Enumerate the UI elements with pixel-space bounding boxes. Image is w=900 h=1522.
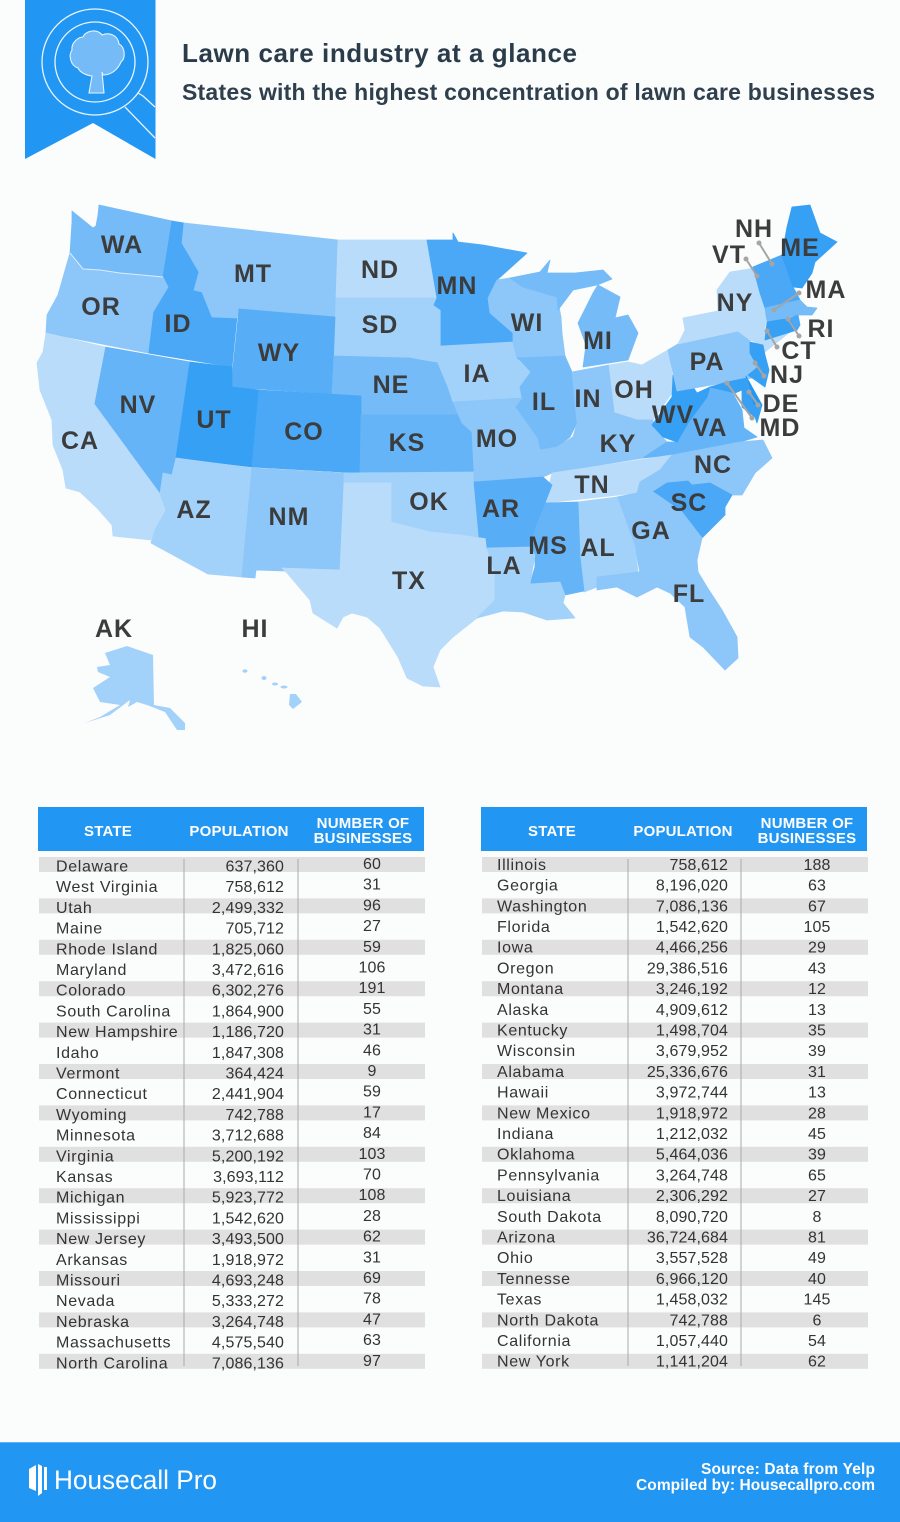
right table rows: Iowa [497, 940, 533, 957]
left table rows: 62 [363, 1229, 381, 1246]
left table rows: 106 [358, 960, 386, 976]
state labels: LA [486, 552, 522, 580]
right table rows: 2,306,292 [656, 1188, 728, 1205]
state labels: ID [164, 310, 192, 338]
state labels: PA [690, 348, 724, 376]
right table rows: Montana [497, 981, 564, 998]
state labels: FL [673, 580, 705, 608]
state labels: NJ [770, 361, 804, 389]
right table rows: 1,212,032 [656, 1126, 728, 1143]
left table rows: 31 [363, 1022, 381, 1039]
left table rows: 3,712,688 [212, 1128, 284, 1145]
right table rows: 40 [808, 1271, 826, 1288]
right table rows: 3,264,748 [656, 1167, 728, 1184]
right table rows: Indiana [497, 1126, 554, 1143]
state labels: NC [694, 451, 732, 479]
left table rows [56, 856, 386, 1372]
state labels: ND [361, 256, 399, 284]
state labels: UT [196, 406, 232, 434]
title: Lawn care industry at a glance [182, 38, 577, 68]
right table rows: Tennesse [497, 1271, 571, 1288]
state labels: TX [392, 567, 426, 595]
left table rows: 60 [363, 856, 381, 873]
left table rows: 27 [363, 918, 381, 935]
right table rows: 45 [808, 1126, 826, 1143]
left table rows: Maryland [56, 962, 127, 979]
right table rows: 13 [808, 1085, 826, 1102]
right table rows: 43 [808, 960, 826, 977]
left table rows: Michigan [56, 1190, 125, 1207]
right table rows: Arizona [497, 1229, 556, 1246]
left table header: NUMBER OF [317, 815, 409, 832]
right table rows: 39 [808, 1043, 826, 1060]
state labels: CO [284, 418, 324, 446]
right table rows: 63 [808, 878, 826, 895]
left table rows: 78 [363, 1291, 381, 1308]
state labels: CA [61, 427, 99, 455]
state labels: MI [583, 327, 613, 355]
state labels: NM [269, 503, 309, 531]
left table rows: 47 [363, 1311, 381, 1328]
state labels: MO [476, 425, 518, 453]
state labels: NV [120, 391, 156, 419]
source line: Source: Data from Yelp [701, 1461, 875, 1478]
right table rows: 3,557,528 [656, 1250, 728, 1267]
left table rows: Nebraska [56, 1314, 130, 1331]
state labels: CT [781, 337, 817, 365]
right table rows: 54 [808, 1333, 826, 1350]
left table header [38, 807, 424, 851]
state labels: MN [437, 272, 477, 300]
state labels: OK [409, 488, 449, 516]
left table rows: Connecticut [56, 1086, 148, 1103]
left table rows: Wyoming [56, 1107, 127, 1124]
right table rows: Pennsylvania [497, 1167, 600, 1184]
left table rows: 191 [358, 980, 386, 997]
right table rows: 29 [808, 940, 826, 957]
right table rows: 145 [804, 1292, 830, 1309]
right table rows: 3,972,744 [656, 1085, 728, 1102]
state labels: MS [528, 532, 568, 560]
left table rows: 59 [363, 1084, 381, 1101]
right table rows: 1,498,704 [656, 1022, 728, 1039]
left table rows: 742,788 [225, 1107, 284, 1124]
left table rows: 1,864,900 [212, 1003, 284, 1020]
left table rows: 5,200,192 [212, 1148, 284, 1165]
left table row stripes [39, 857, 425, 1369]
left table rows: North Carolina [56, 1355, 168, 1372]
state labels: IN [574, 385, 602, 413]
left table rows: Kansas [56, 1169, 113, 1186]
state labels [61, 215, 846, 643]
left table rows: 63 [363, 1332, 381, 1349]
right table rows: 5,464,036 [656, 1147, 728, 1164]
right table rows: Texas [497, 1292, 542, 1309]
left table rows: 84 [363, 1125, 381, 1142]
right table rows: 35 [808, 1022, 826, 1039]
right table rows: 25,336,676 [647, 1064, 728, 1081]
leader lines for northeast states [724, 240, 802, 420]
right table header: POPULATION [633, 823, 733, 840]
left table rows: 1,825,060 [212, 941, 284, 958]
right table rows: Alabama [497, 1064, 565, 1081]
state labels: WY [258, 339, 300, 367]
state labels: HI [242, 615, 268, 643]
right table rows: 758,612 [669, 857, 728, 874]
left table rows: 1,847,308 [212, 1045, 284, 1062]
right table rows: California [497, 1333, 571, 1350]
right table rows: 39 [808, 1147, 826, 1164]
left table rows: 705,712 [225, 921, 284, 938]
left table rows: 4,575,540 [212, 1335, 284, 1352]
left table rows: 55 [363, 1001, 381, 1018]
left table rows: 3,264,748 [212, 1314, 284, 1331]
left table rows: 103 [358, 1146, 386, 1163]
state labels: SC [671, 489, 707, 517]
left table rows: 3,472,616 [212, 962, 284, 979]
right table header: BUSINESSES [758, 830, 856, 847]
state labels: AR [482, 495, 520, 523]
right table rows: Oklahoma [497, 1147, 575, 1164]
left table rows: 28 [363, 1208, 381, 1225]
right table row stripes [482, 857, 868, 1369]
left table rows: 31 [363, 1249, 381, 1266]
state labels: SD [362, 311, 398, 339]
left table rows: Nevada [56, 1293, 115, 1310]
right table rows: Washington [497, 898, 587, 915]
state labels: AZ [176, 496, 212, 524]
state labels: VT [712, 241, 746, 269]
left table rows: Vermont [56, 1066, 120, 1082]
right table rows: Illinois [497, 857, 547, 874]
right table rows: Louisiana [497, 1188, 571, 1205]
state labels: IL [532, 388, 556, 416]
right table rows: Kentucky [497, 1022, 568, 1039]
state labels: AK [95, 615, 133, 643]
subtitle: States with the highest concentration of lawn care businesses [182, 79, 875, 105]
left table rows: 758,612 [225, 879, 284, 896]
right table rows: Alaska [497, 1002, 549, 1019]
state labels: ME [780, 234, 820, 262]
state labels: RI [808, 315, 834, 343]
left table rows: New Jersey [56, 1231, 146, 1248]
state labels: WA [101, 231, 143, 259]
state labels: NY [717, 289, 753, 317]
right table rows: New Mexico [497, 1105, 591, 1122]
right table rows: 29,386,516 [647, 960, 728, 977]
left table rows: 96 [363, 897, 381, 914]
right table header [481, 807, 867, 851]
left table rows: 1,542,620 [212, 1210, 284, 1227]
left table rows: New Hampshire [56, 1024, 178, 1041]
left table rows: 97 [363, 1353, 381, 1370]
right table rows: Oregon [497, 960, 554, 977]
left table rows: 17 [363, 1104, 381, 1121]
left table rows: West Virginia [56, 879, 158, 896]
right table header: STATE [528, 823, 576, 840]
left table rows: Mississippi [56, 1210, 140, 1227]
state labels: WI [511, 309, 543, 337]
right table rows: 1,542,620 [656, 919, 728, 936]
right table rows: 1,918,972 [656, 1105, 728, 1122]
right table rows: Georgia [497, 878, 558, 895]
left table rows: 2,441,904 [212, 1086, 284, 1103]
state labels: KY [600, 430, 636, 458]
right table rows: Florida [497, 919, 550, 936]
state labels: AL [580, 534, 616, 562]
state labels: OH [614, 376, 654, 404]
left table rows: 7,086,136 [212, 1355, 284, 1372]
left table rows: 6,302,276 [212, 983, 284, 1000]
left table rows: Delaware [56, 858, 129, 876]
state labels: WV [652, 401, 694, 429]
left table rows: 31 [363, 877, 381, 894]
left table rows: Maine [56, 921, 103, 938]
left table rows: 637,360 [225, 858, 284, 876]
left table rows: 108 [358, 1187, 386, 1204]
right table rows: 67 [808, 898, 826, 915]
state labels: MT [234, 260, 272, 288]
state labels: VA [693, 414, 727, 442]
right table rows: 3,246,192 [656, 981, 728, 998]
state labels: DE [763, 390, 799, 418]
right table rows: 65 [808, 1167, 826, 1184]
right table rows: 1,458,032 [656, 1292, 728, 1309]
left table rows: 5,333,272 [212, 1293, 284, 1310]
right table rows: 1,141,204 [656, 1354, 728, 1371]
right table rows: 31 [808, 1064, 826, 1081]
left table rows: 364,424 [225, 1066, 284, 1082]
state labels: NE [373, 371, 409, 399]
right table rows: 105 [804, 919, 830, 936]
left table rows: Missouri [56, 1272, 121, 1290]
left table rows: 3,693,112 [213, 1169, 284, 1186]
right table rows: 28 [808, 1105, 826, 1122]
left table rows: Massachusetts [56, 1335, 171, 1352]
footer band [0, 1442, 900, 1522]
right table rows: 6 [812, 1312, 822, 1329]
left table rows: Idaho [56, 1045, 99, 1062]
left table rows: Rhode Island [56, 941, 158, 958]
right table rows: 36,724,684 [647, 1229, 728, 1246]
state labels: NH [735, 215, 773, 243]
left table header: POPULATION [189, 823, 289, 840]
left table rows: Virginia [56, 1148, 114, 1165]
left table rows: 46 [363, 1042, 381, 1059]
left table rows: 3,493,500 [212, 1231, 284, 1248]
right table rows: Ohio [497, 1250, 533, 1267]
state labels: MD [760, 414, 800, 442]
right table rows: 8 [812, 1209, 822, 1226]
choropleth map of US states [37, 205, 837, 687]
left table rows: 1,918,972 [212, 1252, 284, 1269]
right table rows: 8,090,720 [656, 1209, 728, 1226]
right table rows: New York [497, 1354, 570, 1371]
left table rows: Utah [56, 900, 92, 917]
left table rows: Arkansas [56, 1252, 128, 1269]
left table rows: 1,186,720 [212, 1024, 284, 1041]
left table rows: 70 [363, 1166, 381, 1184]
icon: Housecall Pro logo [29, 1464, 47, 1496]
brand name: Housecall Pro [54, 1465, 217, 1495]
right table rows: 81 [808, 1229, 826, 1246]
right table rows: 49 [808, 1250, 826, 1267]
state labels: MA [806, 276, 846, 304]
right table rows: 3,679,952 [656, 1043, 728, 1060]
right table rows: 188 [804, 857, 830, 874]
right table rows: North Dakota [497, 1312, 599, 1329]
state labels: GA [631, 517, 671, 545]
right table rows: 27 [808, 1188, 826, 1205]
right table rows: South Dakota [497, 1209, 602, 1226]
Alaska inset [85, 646, 185, 730]
right table rows: 4,466,256 [656, 940, 728, 957]
state labels: OR [81, 293, 121, 321]
left table rows: 59 [363, 939, 381, 956]
right table rows: 13 [808, 1002, 826, 1019]
state labels: TN [574, 471, 610, 499]
right table rows [497, 857, 830, 1371]
left table header: STATE [84, 823, 132, 840]
table: right [481, 807, 868, 1371]
left table rows: 2,499,332 [212, 900, 284, 917]
right table rows: 62 [808, 1354, 826, 1371]
left table rows: Colorado [56, 983, 126, 1000]
left table rows: 69 [363, 1270, 381, 1287]
right table rows: 742,788 [669, 1312, 728, 1329]
ribbon badge with magnifier and tree icon [25, 0, 156, 159]
right table rows: Wisconsin [497, 1043, 576, 1060]
right table rows: 12 [808, 981, 826, 998]
right table rows: 4,909,612 [656, 1002, 728, 1019]
Hawaii inset [242, 669, 302, 709]
state labels: KS [389, 429, 425, 457]
right table rows: 1,057,440 [656, 1333, 728, 1350]
right table rows: 7,086,136 [656, 898, 728, 915]
state labels: IA [464, 360, 490, 388]
left table rows: 9 [368, 1063, 376, 1080]
right table header: NUMBER OF [761, 815, 853, 832]
left table rows: South Carolina [56, 1003, 171, 1020]
left table rows: 4,693,248 [212, 1272, 284, 1290]
right table rows: Hawaii [497, 1085, 549, 1102]
right table rows: 8,196,020 [656, 878, 728, 895]
left table rows: 5,923,772 [212, 1190, 284, 1207]
table: left [38, 807, 425, 1372]
compiled by line: Compiled by: Housecallpro.com [636, 1477, 875, 1494]
right table rows: 6,966,120 [656, 1271, 728, 1288]
left table rows: Minnesota [56, 1128, 136, 1145]
left table header: BUSINESSES [314, 830, 412, 847]
